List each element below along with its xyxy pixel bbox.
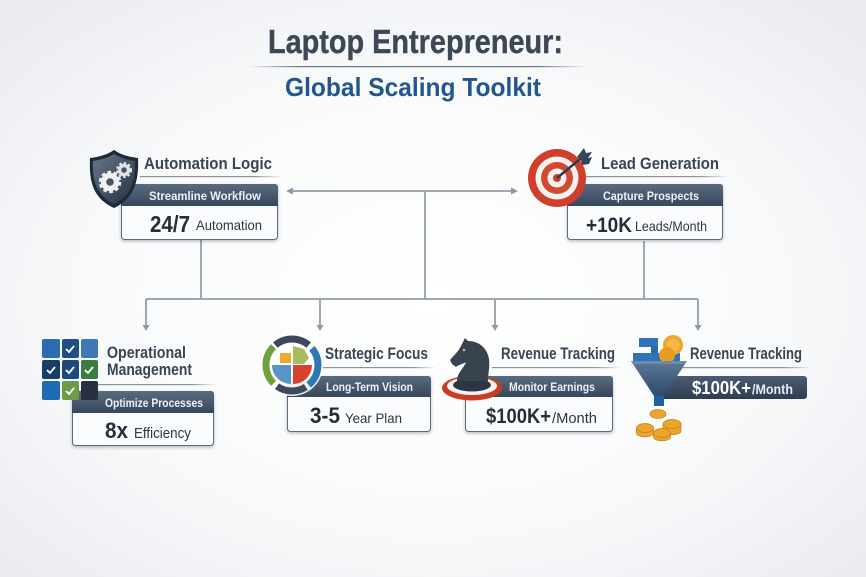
value bar: /Month (752, 381, 793, 397)
subtitle: Global Scaling Toolkit (285, 72, 541, 102)
heading: lead generation: Lead Generation (601, 154, 719, 173)
icon: chess knight (442, 338, 502, 400)
panel: automation logic (90, 150, 283, 240)
card: revenue tracking: /Month (552, 410, 597, 427)
panel: strategic focus (261, 334, 436, 432)
card: strategic focus: 3-5 (310, 403, 340, 428)
heading: revenue tracking: Revenue Tracking (690, 344, 802, 363)
icon: funnel with coins (631, 335, 687, 441)
card: automation logic: Streamline Workflow (149, 189, 262, 203)
card: operational management: 8x (105, 418, 129, 443)
card: revenue tracking (465, 376, 613, 432)
card: revenue tracking: Monitor Earnings (509, 380, 595, 394)
icon: checklist grid (42, 339, 98, 400)
card: strategic focus: Year Plan (345, 410, 402, 426)
card: automation logic (121, 184, 278, 240)
panel: operational management: Management (107, 360, 192, 379)
panel: lead generation (528, 148, 728, 240)
card: revenue tracking: $100K+ (486, 405, 551, 428)
card: automation logic: Automation (196, 217, 262, 233)
heading: revenue tracking: Revenue Tracking (501, 344, 615, 363)
card: lead generation: Capture Prospects (603, 189, 699, 203)
heading: automation logic: Automation Logic (144, 154, 272, 173)
card: lead generation (567, 184, 723, 240)
card: automation logic: 24/7 (150, 211, 190, 237)
card: strategic focus (287, 376, 431, 432)
card: lead generation: +10K (586, 214, 632, 237)
panel: revenue tracking (funnel) (631, 335, 812, 441)
card: operational management: Optimize Processes (105, 396, 203, 410)
heading: operational management: Operational (107, 343, 186, 362)
panel: operational management (42, 339, 216, 446)
icon: shield with gears (90, 150, 138, 208)
card: strategic focus: Long-Term Vision (326, 380, 413, 394)
card: operational management: Efficiency (134, 425, 191, 442)
title: Laptop Entrepreneur: (268, 23, 563, 60)
card: operational management (72, 391, 214, 446)
value bar: $100K+ (692, 378, 751, 398)
icon: strategy wheel (261, 334, 323, 396)
panel: revenue tracking (knight) (442, 338, 622, 432)
icon: target with arrow (528, 148, 592, 207)
connector arrows (142, 188, 702, 331)
heading: strategic focus: Strategic Focus (325, 344, 428, 363)
card: lead generation: Leads/Month (635, 218, 707, 234)
value bar (655, 376, 807, 399)
